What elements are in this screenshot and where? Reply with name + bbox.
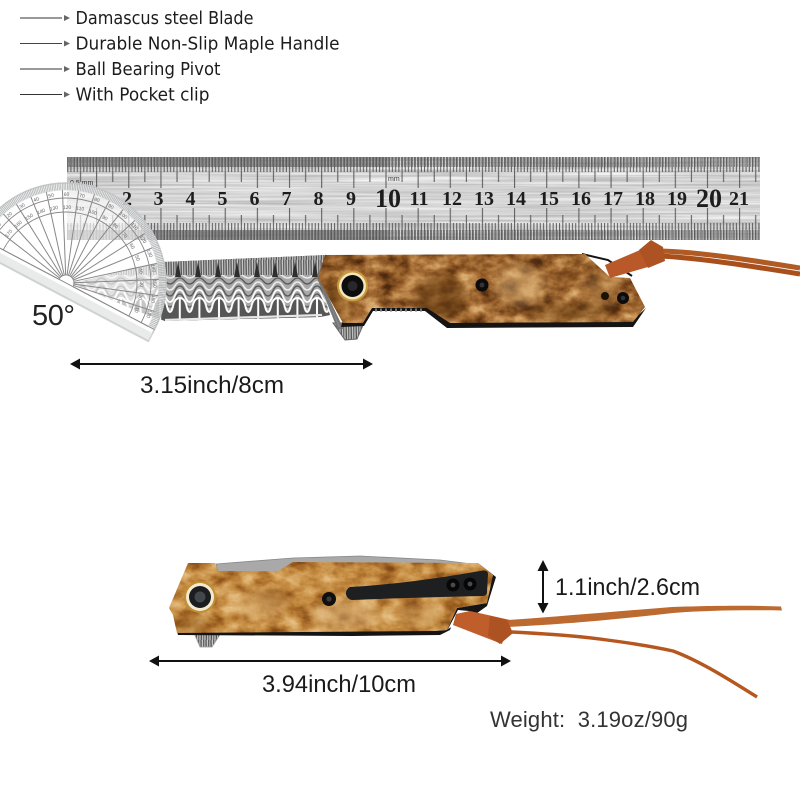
feature: Ball Bearing Pivot — [20, 59, 220, 80]
ruler numbers: 13 — [474, 188, 494, 210]
ruler numbers: 20 — [696, 184, 722, 213]
damascus blade — [72, 255, 330, 321]
flipper tab — [333, 323, 364, 340]
ruler numbers: 17 — [603, 188, 623, 210]
protractor scale numbers: 150 — [24, 213, 35, 222]
protractor scale numbers: 70 — [120, 232, 128, 240]
protractor scale numbers: 170 — [144, 309, 153, 319]
protractor scale numbers: 70 — [79, 193, 85, 200]
protractor scale numbers: 110 — [129, 222, 139, 232]
feature: Damascus steel Blade: Damascus steel Blade — [76, 8, 254, 29]
closed knife — [165, 556, 782, 697]
ruler numbers: 18 — [635, 188, 655, 210]
ruler numbers: 9 — [346, 188, 356, 210]
open knife — [60, 240, 800, 340]
maple burl handle — [318, 254, 645, 323]
protractor scale numbers: 40 — [137, 268, 144, 275]
protractor scale numbers — [0, 161, 189, 321]
rear screw — [617, 292, 629, 304]
handle screw — [476, 278, 488, 292]
protractor scale numbers: 100 — [88, 209, 98, 217]
closed length arrow — [149, 656, 511, 666]
ruler numbers: 19 — [667, 188, 687, 210]
ruler numbers: 10 — [375, 184, 401, 213]
protractor scale numbers: 90 — [107, 203, 115, 211]
lanyard hole — [601, 292, 609, 300]
feature list — [20, 8, 340, 106]
ruler numbers: 4 — [186, 188, 196, 210]
protractor scale numbers: 60 — [128, 242, 136, 251]
handle screw — [322, 592, 336, 606]
leather lanyard — [605, 240, 800, 278]
ruler numbers: 16 — [571, 188, 591, 210]
protractor scale numbers: 120 — [63, 205, 72, 211]
feature: With Pocket clip: With Pocket clip — [76, 84, 210, 106]
closed length label: 3.94inch/10cm — [262, 671, 416, 698]
protractor scale numbers: 110 — [76, 206, 85, 213]
pivot-side damascus strip — [318, 255, 342, 328]
protractor scale numbers: 50 — [48, 193, 55, 200]
protractor scale numbers: 130 — [145, 248, 153, 259]
protractor scale numbers: 140 — [36, 208, 47, 216]
pocket clip — [346, 570, 488, 600]
protractor scale numbers: 80 — [111, 222, 119, 230]
protractor scale numbers: 130 — [49, 205, 59, 213]
protractor scale numbers: 20 — [136, 294, 143, 301]
blade length arrow — [70, 358, 373, 370]
handle thickness arrow — [538, 560, 548, 614]
feature: Ball Bearing Pivot: Ball Bearing Pivot — [76, 59, 220, 80]
ruler numbers: 3 — [154, 188, 164, 210]
leather lanyard — [453, 606, 782, 697]
ruler numbers: 21 — [729, 188, 749, 210]
protractor scale numbers: 160 — [149, 294, 156, 304]
blade length label: 3.15inch/8cm — [140, 372, 284, 399]
flipper tab — [194, 633, 221, 647]
black liner — [177, 563, 496, 636]
protractor scale numbers: 80 — [93, 197, 100, 204]
ruler numbers: 15 — [539, 188, 559, 210]
protractor scale numbers: 120 — [138, 234, 147, 245]
protractor scale numbers: 30 — [138, 281, 144, 287]
protractor scale numbers: 90 — [101, 215, 109, 223]
ruler numbers: 5 — [218, 188, 228, 210]
maple burl handle — [169, 562, 493, 633]
ruler numbers: 2 — [122, 188, 132, 210]
protractor scale numbers: 10 — [132, 306, 140, 314]
steel ruler — [67, 157, 760, 240]
protractor scale numbers: 60 — [64, 192, 70, 198]
protractor scale numbers: 30 — [19, 202, 27, 210]
blade spine — [216, 556, 480, 572]
protractor scale numbers: 170 — [4, 229, 14, 239]
ruler numbers: 6 — [250, 188, 260, 210]
ruler numbers — [122, 184, 749, 213]
weight label: Weight: 3.19oz/90g — [490, 707, 688, 732]
steel ruler: 0.5 mm — [70, 180, 94, 187]
protractor scale numbers: 140 — [149, 264, 157, 273]
ruler numbers: 12 — [442, 188, 462, 210]
protractor scale numbers: 160 — [13, 220, 24, 230]
protractor 50 degrees — [0, 148, 201, 341]
lanyard notch — [448, 610, 469, 629]
protractor scale numbers: 50 — [133, 255, 141, 262]
protractor scale numbers: 20 — [6, 211, 14, 219]
feature: Damascus steel Blade — [20, 8, 254, 29]
ruler numbers: 7 — [282, 188, 292, 210]
ruler numbers: 11 — [410, 188, 428, 210]
protractor scale numbers: 150 — [151, 279, 157, 288]
protractor scale numbers: 40 — [33, 196, 40, 204]
ruler numbers: 8 — [314, 188, 324, 210]
feature: With Pocket clip — [20, 84, 210, 106]
pivot — [337, 270, 368, 302]
pivot — [184, 581, 216, 613]
rear liner line — [582, 254, 632, 276]
ruler numbers: 14 — [506, 188, 526, 210]
liner edge — [341, 305, 646, 328]
handle thickness label: 1.1inch/2.6cm — [555, 574, 700, 601]
protractor scale numbers: 100 — [118, 211, 128, 221]
blade angle label: 50° — [32, 300, 75, 332]
feature: Durable Non-Slip Maple Handle: Durable Non-Slip Maple Handle — [76, 34, 340, 54]
steel ruler: mm — [388, 176, 400, 183]
serrated jimping — [375, 308, 424, 312]
